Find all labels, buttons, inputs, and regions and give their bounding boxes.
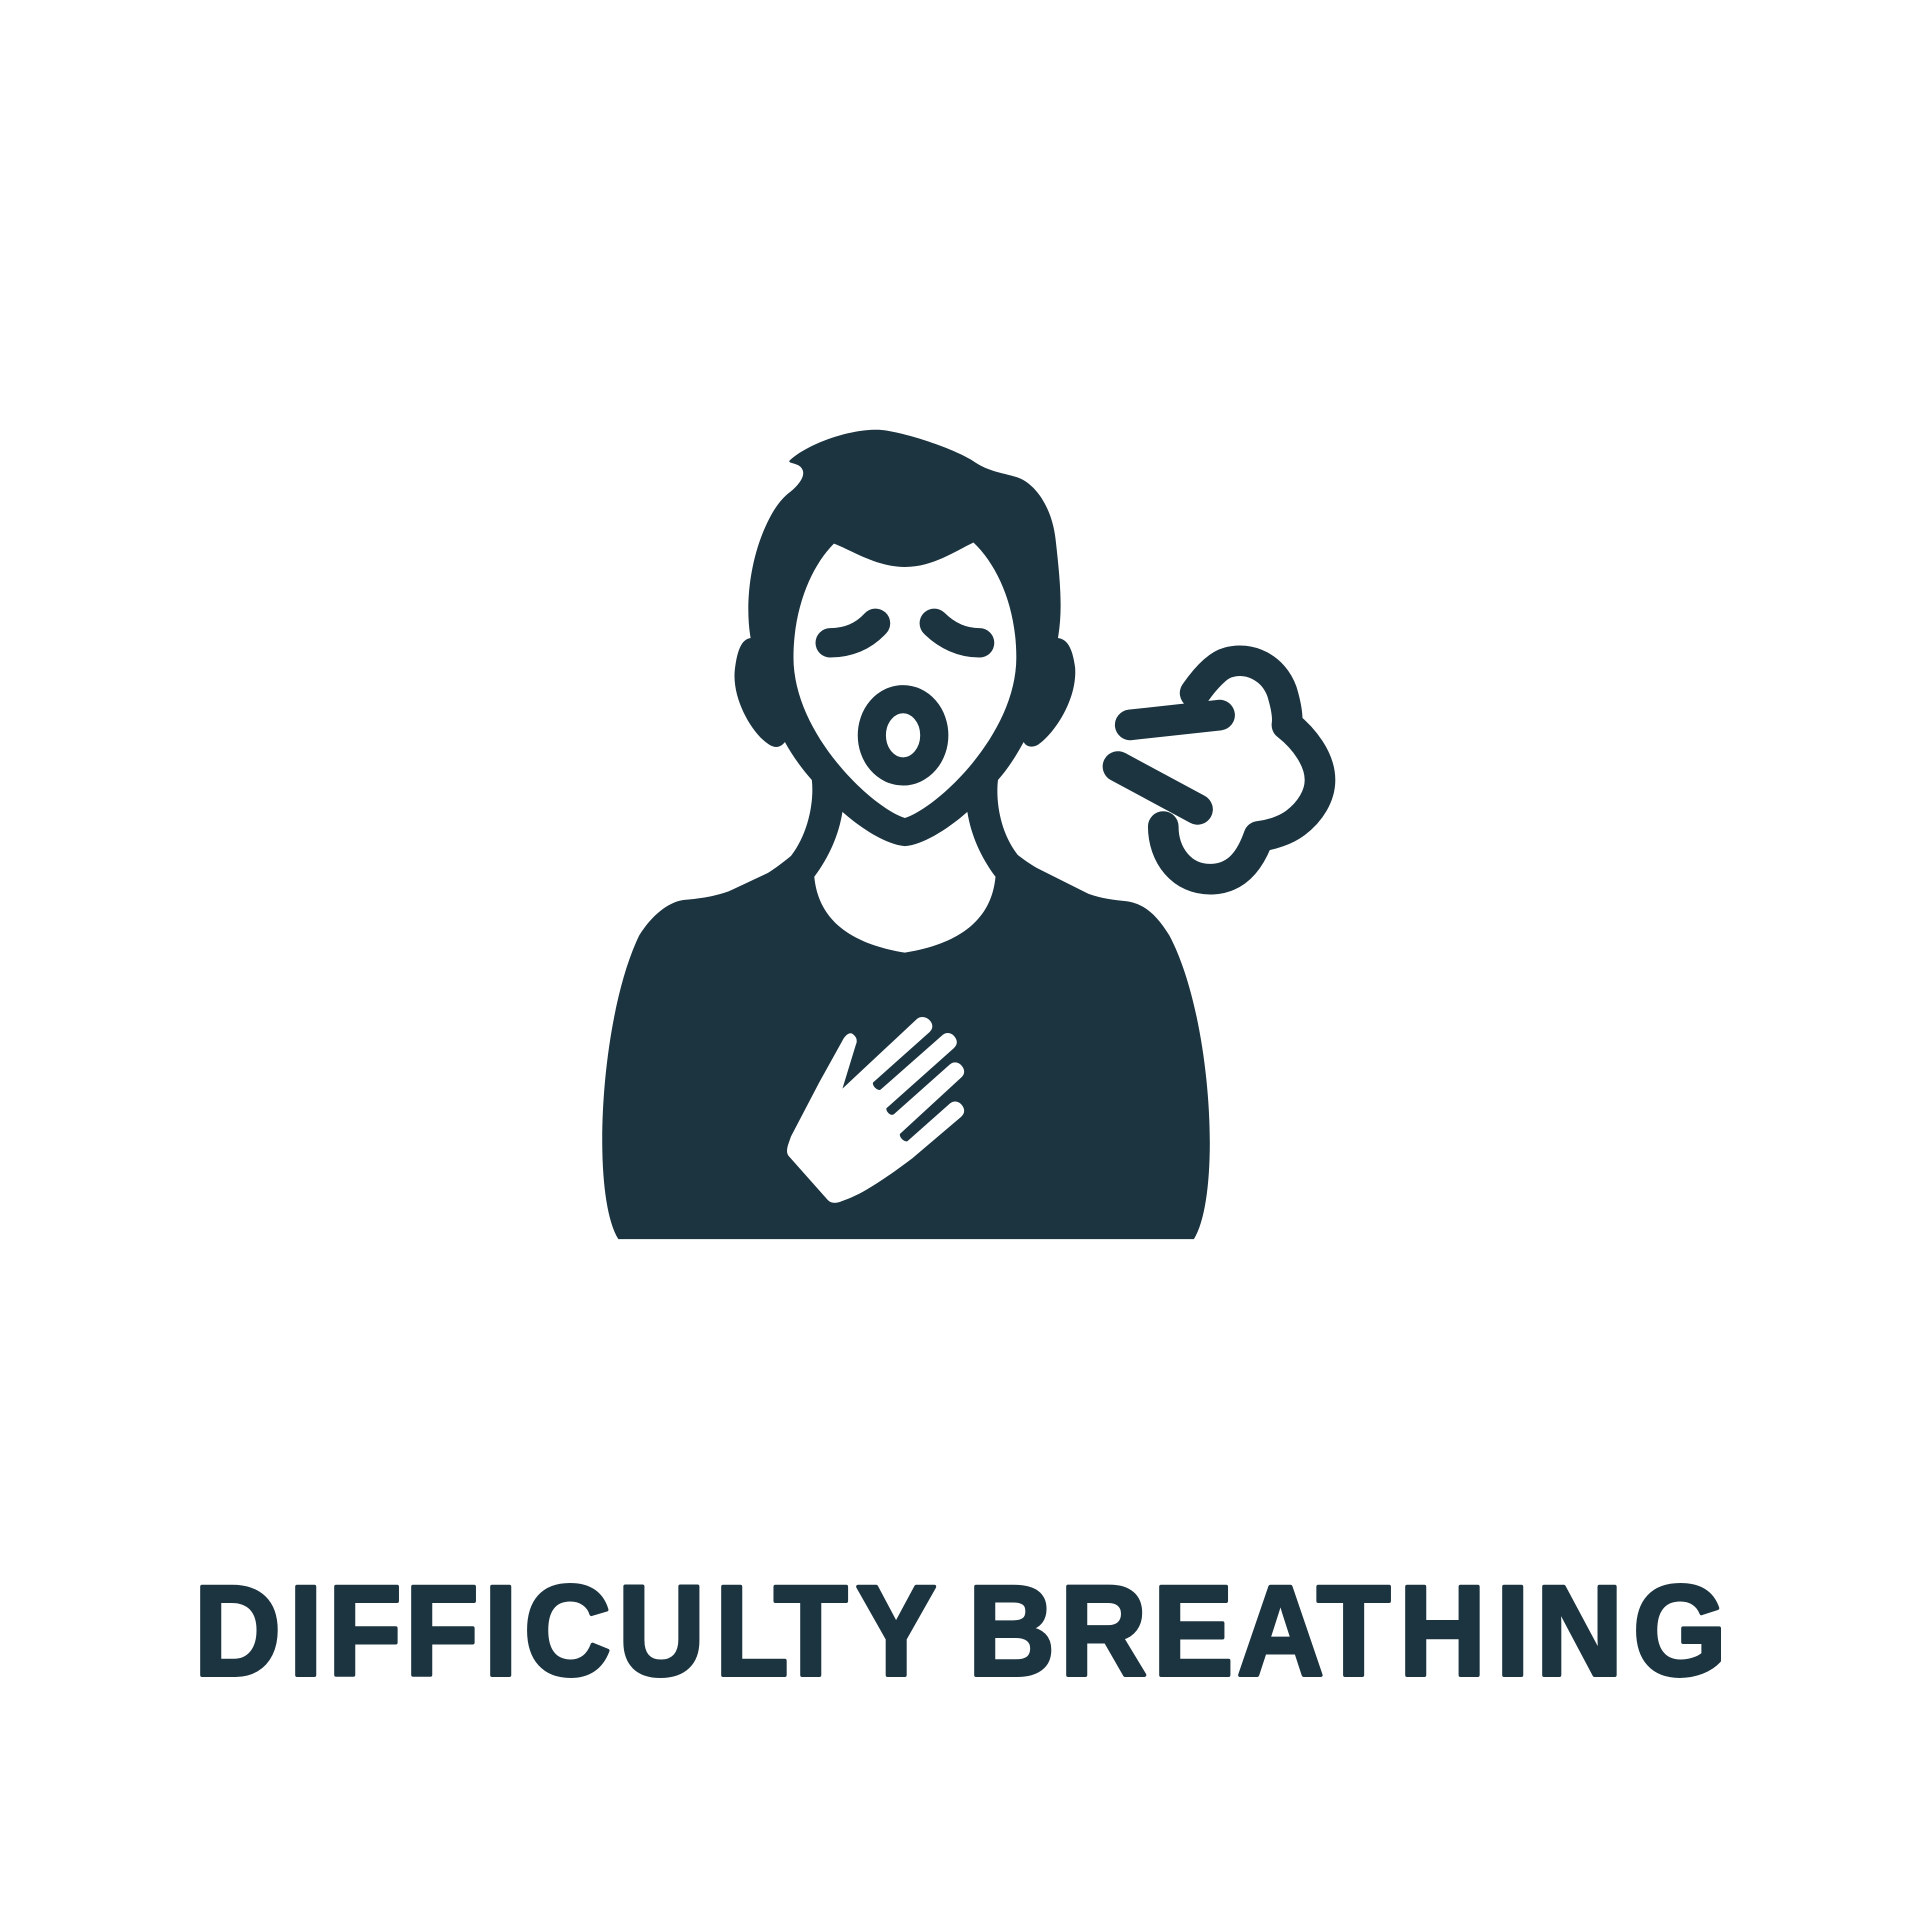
face	[793, 542, 1016, 818]
neck and collar	[814, 812, 996, 953]
icon: breath cloud	[1118, 661, 1320, 879]
hand on chest	[787, 1017, 964, 1203]
cloud outline	[1163, 661, 1320, 879]
silhouette: hair, ears, neck and torso	[602, 430, 1210, 1239]
right eye	[934, 623, 980, 643]
figure: person	[602, 430, 1210, 1239]
left eye	[830, 623, 876, 643]
open mouth	[872, 699, 934, 771]
breath line lower	[1118, 767, 1198, 809]
breath line upper	[1130, 715, 1220, 725]
title: DIFFICULTY BREATHING	[194, 1561, 1727, 1703]
